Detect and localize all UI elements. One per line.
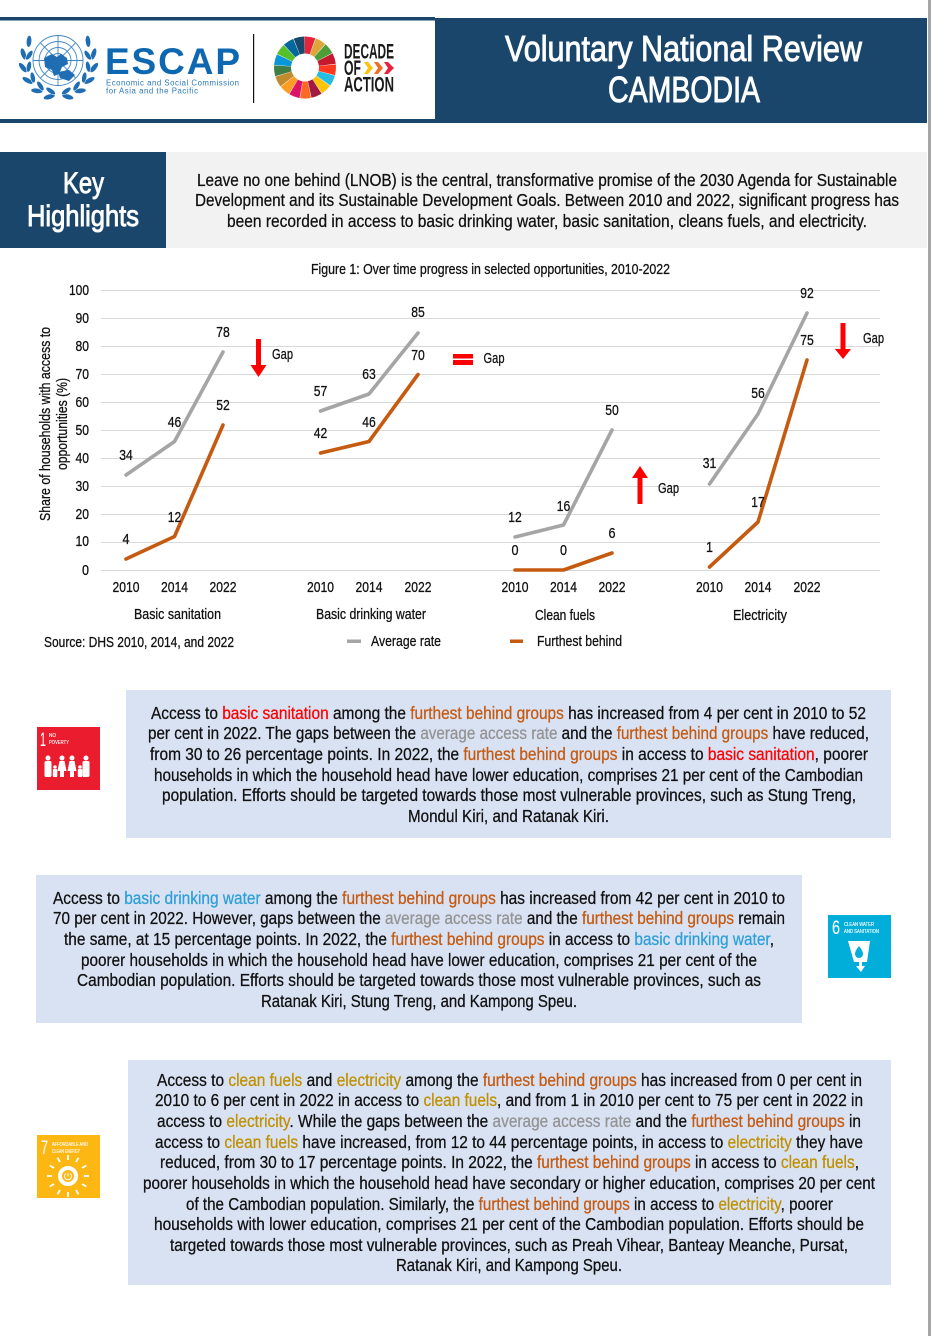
- x axis years: 2014: [744, 579, 772, 596]
- arrow: sanitation gap down: Gap: [272, 346, 293, 363]
- x axis years: [112, 579, 820, 596]
- figure title: Figure 1: Over time progress in selected opportunities, 2010-2022: [311, 262, 670, 278]
- x axis years: 2010: [696, 579, 723, 596]
- x axis years: 2014: [550, 579, 577, 596]
- y axis labels: 0: [82, 562, 89, 579]
- category labels: Basic sanitation: [134, 606, 221, 623]
- y axis labels: 100: [69, 282, 89, 299]
- panel: clean fuels and electricity: [128, 1060, 891, 1285]
- panel: clean fuels and electricity: Ratanak Kiri, and Kampong Speu.: [396, 1255, 622, 1275]
- panel: clean fuels and electricity: 2010 to 6 per cent in 2022 in access to clean fuels, and from 1 in 2010 per cent to 75 per cent in 2022 in: [155, 1090, 863, 1110]
- icon: SDG 1 no poverty: NO: [49, 733, 56, 739]
- panel: clean fuels and electricity: targeted towards those most vulnerable provinces, such as Preah Vihear, Banteay Meanche, Pursat,: [170, 1235, 848, 1255]
- x axis years: 2022: [404, 579, 432, 596]
- data labels: 42: [314, 425, 327, 442]
- icon: SDG 7 clean energy: 7: [41, 1138, 48, 1159]
- icon: SDG 1 no poverty: [37, 727, 100, 790]
- icon: SDG 6 clean water: [828, 915, 891, 978]
- data labels: 34: [119, 447, 133, 464]
- key highlights text: been recorded in access to basic drinking water, basic sanitation, cleans fuels, and electricity.: [227, 211, 867, 231]
- ESCAP wordmark: for Asia and the Pacific: [106, 86, 198, 96]
- data labels: 56: [751, 385, 765, 402]
- arrow: electricity gap down: [835, 323, 884, 359]
- key highlights heading: Highlights: [27, 200, 139, 233]
- Decade of Action wordmark: OF: [344, 57, 361, 80]
- panel: basic drinking water: the same, at 15 percentage points. In 2022, the furthest behind groups in access to basic drinking water,: [64, 929, 774, 949]
- icon: SDG 7 clean energy: CLEAN ENERGY: [52, 1149, 80, 1155]
- panel: basic drinking water: Cambodian population. Efforts should be targeted towards those most vulnerable provinces, such as: [77, 970, 761, 990]
- category labels: Electricity: [733, 607, 787, 624]
- y axis title: Share of households with access to: [37, 327, 54, 521]
- y axis labels: 40: [76, 450, 89, 467]
- key highlights text: [166, 152, 927, 248]
- data labels: 75: [800, 332, 814, 349]
- icon: SDG 7 clean energy: AFFORDABLE AND: [52, 1142, 88, 1148]
- panel: basic sanitation: population. Efforts should be targeted towards those most vulnerable provinces, such as Stung Treng,: [162, 785, 856, 805]
- key highlights heading: Key: [63, 167, 104, 200]
- panel: basic sanitation: [126, 690, 891, 838]
- data labels: 46: [168, 414, 181, 431]
- icon: UN emblem: [17, 35, 100, 101]
- data labels: 46: [362, 414, 376, 431]
- icon: SDG 1 no poverty: 1: [40, 730, 46, 751]
- header banner: [0, 17, 927, 123]
- category labels: [134, 606, 787, 624]
- panel: clean fuels and electricity: Access to clean fuels and electricity among the furthest behind groups has increased from 0 per cent in: [157, 1070, 862, 1090]
- line chart: progress 2010-2022: [37, 282, 884, 650]
- data labels: 50: [605, 402, 619, 419]
- category labels: Clean fuels: [535, 607, 595, 624]
- x axis years: 2022: [794, 579, 820, 596]
- icon: SDG 1 no poverty: POVERTY: [49, 740, 70, 746]
- data labels: 85: [411, 304, 425, 321]
- data labels: 4: [122, 531, 130, 548]
- data labels: 78: [216, 324, 230, 341]
- data labels: 70: [411, 347, 425, 364]
- arrow: clean fuels gap up: Gap: [658, 480, 679, 497]
- data labels: 52: [216, 397, 230, 414]
- panel: clean fuels and electricity: access to electricity. While the gaps between the average access rate and the furthest behind groups in: [157, 1111, 861, 1131]
- icon: SDG 6 clean water: CLEAN WATER: [844, 922, 874, 928]
- y axis labels: 30: [76, 478, 89, 495]
- icon: SDG 6 clean water: 6: [832, 918, 840, 939]
- panel: basic drinking water: Ratanak Kiri, Stung Treng, and Kampong Speu.: [261, 991, 577, 1011]
- y axis labels: 20: [76, 506, 89, 523]
- chart legend: Average rate: [371, 633, 441, 650]
- panel: clean fuels and electricity: reduced, from 30 to 17 percentage points. In 2022, the furthest behind groups in access to clean fuels,: [160, 1152, 859, 1172]
- Decade of Action wordmark: [344, 40, 394, 96]
- x axis years: 2022: [598, 579, 626, 596]
- Decade of Action wordmark: ACTION: [344, 74, 394, 96]
- panel: basic sanitation: from 30 to 26 percentage points. In 2022, the furthest behind groups in access to basic sanitation, poorer: [150, 744, 868, 764]
- icon: SDG wheel: [273, 36, 337, 99]
- icon: water gap equal: [453, 350, 504, 367]
- panel: basic drinking water: poorer households in which the household head have lower education, comprises 21 per cent of the: [81, 950, 757, 970]
- x axis years: 2014: [356, 579, 382, 596]
- y axis title: opportunities (%): [54, 378, 71, 470]
- data labels: 12: [168, 509, 181, 526]
- y axis labels: 90: [76, 310, 89, 327]
- data labels: 16: [557, 498, 570, 515]
- panel: basic drinking water: [36, 875, 802, 1023]
- y axis labels: 80: [76, 338, 89, 355]
- y axis labels: 50: [76, 422, 89, 439]
- panel: basic sanitation: Mondul Kiri, and Ratanak Kiri.: [408, 806, 609, 826]
- arrow: electricity gap down: Gap: [863, 330, 884, 347]
- title panel: CAMBODIA: [608, 69, 760, 110]
- x axis years: 2010: [307, 579, 334, 596]
- icon: SDG 6 clean water: AND SANITATION: [844, 929, 879, 935]
- data labels: 31: [703, 455, 716, 472]
- panel: basic drinking water: Access to basic drinking water among the furthest behind groups has increased from 42 per cent in 2010 to: [53, 888, 785, 908]
- icon: SDG 7 clean energy: [37, 1135, 100, 1198]
- icon: water gap equal: Gap: [484, 350, 504, 367]
- y axis labels: 10: [76, 533, 89, 550]
- data labels: [119, 285, 814, 559]
- x axis years: 2022: [210, 579, 236, 596]
- y axis labels: 70: [76, 366, 89, 383]
- Decade of Action wordmark: DECADE: [344, 40, 394, 64]
- panel: clean fuels and electricity: of the Cambodian population. Similarly, the furthest behind groups in access to electricity, poorer: [186, 1194, 833, 1214]
- panel: basic drinking water: 70 per cent in 2022. However, gaps between the average access rate and the furthest behind groups remain: [53, 908, 785, 928]
- chart legend: [347, 633, 622, 650]
- furthest behind lines: [126, 360, 807, 570]
- ESCAP wordmark: ESCAP: [105, 41, 240, 82]
- y axis labels: 60: [76, 394, 89, 411]
- x axis years: 2010: [502, 579, 528, 596]
- data labels: 0: [512, 542, 518, 559]
- title panel: Voluntary National Review: [505, 28, 863, 69]
- data labels: 6: [608, 525, 616, 542]
- data labels: 1: [706, 539, 713, 556]
- average rate lines: [126, 313, 807, 537]
- y axis labels: [69, 282, 89, 579]
- x axis years: 2014: [161, 579, 188, 596]
- key highlights heading: [0, 152, 166, 248]
- panel: basic sanitation: per cent in 2022. The gaps between the average access rate and the furthest behind groups have reduced,: [148, 723, 869, 743]
- arrow: clean fuels gap up: [632, 466, 679, 504]
- data labels: 0: [560, 542, 567, 559]
- panel: basic sanitation: Access to basic sanitation among the furthest behind groups has increased from 4 per cent in 2010 to 52: [151, 703, 866, 723]
- ESCAP wordmark: Economic and Social Commission: [106, 78, 239, 88]
- category labels: Basic drinking water: [316, 606, 426, 623]
- data labels: 92: [800, 285, 814, 302]
- x axis years: 2010: [112, 579, 140, 596]
- panel: clean fuels and electricity: access to clean fuels have increased, from 12 to 44 percentage points, in access to electricity they have: [155, 1132, 863, 1152]
- chart legend: Furthest behind: [537, 633, 622, 650]
- data labels: 17: [751, 494, 765, 511]
- y axis title: [37, 327, 71, 521]
- data labels: 63: [362, 366, 376, 383]
- data labels: 57: [314, 383, 327, 400]
- data labels: 12: [508, 509, 522, 526]
- arrow: sanitation gap down: [250, 339, 293, 377]
- title panel: [435, 18, 927, 123]
- source note: Source: DHS 2010, 2014, and 2022: [44, 634, 234, 651]
